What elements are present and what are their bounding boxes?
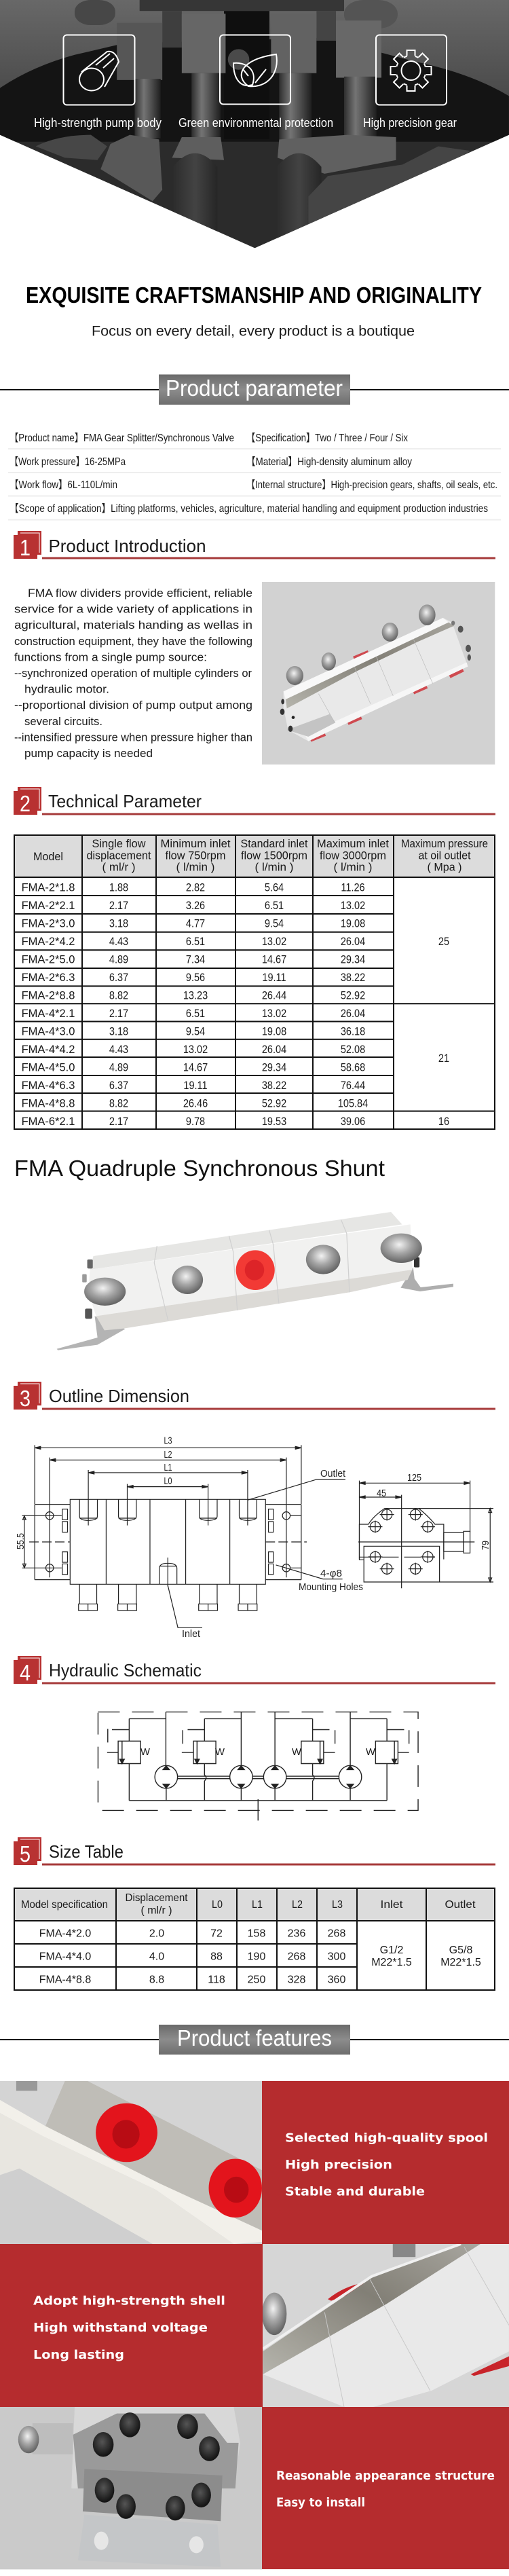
dimension labels: 79	[480, 1541, 491, 1550]
size table body: 300	[328, 1951, 345, 1962]
dimension labels: 125	[407, 1472, 421, 1484]
red panel: selected high-quality spool	[262, 2081, 509, 2244]
section heading 3: outline dimension	[14, 1382, 495, 1411]
product introduction text: service for a wide variety of applications in	[14, 604, 252, 616]
column: minimum inlet flow: 9.78	[186, 1116, 205, 1128]
size table body: 158	[248, 1928, 265, 1939]
dimension labels: L3	[164, 1435, 172, 1446]
section heading 4: hydraulic schematic: 4	[20, 1660, 31, 1685]
table header row: ( l/min )	[255, 861, 293, 873]
product introduction text: hydraulic motor.	[24, 684, 109, 696]
size table header: L2	[292, 1899, 303, 1911]
size table body: FMA-4*2.0	[39, 1928, 91, 1939]
product photo: angled flow divider on grey	[262, 582, 495, 765]
hero feature labels: High-strength pump body	[34, 116, 162, 130]
size table body: 4.0	[149, 1951, 164, 1962]
column: minimum inlet flow: 4.77	[186, 918, 205, 930]
table header row: Minimum inlet	[160, 838, 231, 850]
table: size table	[14, 1888, 495, 1990]
product introduction text: several circuits.	[24, 716, 102, 728]
feature row 3	[0, 2407, 509, 2569]
product introduction text: --intensified pressure when pressure higher than	[14, 731, 252, 743]
dimension labels: 4-φ8	[320, 1568, 342, 1579]
size table body: FMA-4*4.0	[39, 1951, 91, 1962]
size table body: M22*1.5	[371, 1957, 412, 1968]
table header row	[33, 838, 488, 873]
size table header: Displacement	[125, 1892, 188, 1904]
column: minimum inlet flow	[183, 882, 208, 1128]
column: maximum pressure	[438, 936, 449, 1128]
column: single flow displacement: 6.37	[109, 972, 128, 984]
table header row: Maximum inlet	[317, 838, 389, 850]
size table header: L1	[252, 1899, 263, 1911]
section heading 2: technical parameter: Technical Parameter	[48, 791, 202, 811]
table: technical parameters	[14, 834, 495, 1129]
table header row: displacement	[87, 850, 151, 862]
hero feature labels: Green environmental protection	[178, 116, 333, 130]
column: maximum inlet flow: 38.22	[341, 972, 365, 984]
section heading 5: size table: 5	[20, 1841, 31, 1866]
red panel: reasonable appearance structure: Easy to install	[276, 2496, 365, 2509]
column: standard inlet flow: 38.22	[262, 1080, 286, 1092]
section heading 1: product introduction: Product Introduction	[49, 536, 206, 556]
column: maximum pressure: 25	[438, 936, 449, 948]
column: model: FMA-2*5.0	[22, 953, 75, 965]
photo: end plate and mounting bracket	[0, 2407, 262, 2569]
column: standard inlet flow: 19.08	[262, 1026, 286, 1038]
column: minimum inlet flow: 9.54	[186, 1026, 205, 1038]
column: standard inlet flow: 26.04	[262, 1044, 286, 1056]
table header row: Single flow	[92, 838, 146, 850]
size table header: Outlet	[445, 1899, 476, 1911]
table header row: Standard inlet	[240, 838, 308, 850]
parameter list: 【Material】High-density aluminum alloy	[246, 456, 412, 468]
column: standard inlet flow: 29.34	[262, 1062, 286, 1074]
relief valve spring labels: W	[366, 1746, 376, 1758]
column: standard inlet flow	[262, 882, 286, 1128]
column: maximum inlet flow: 36.18	[341, 1026, 365, 1038]
size table body: M22*1.5	[440, 1957, 481, 1968]
column: minimum inlet flow: 9.56	[186, 972, 205, 984]
relief valve spring labels	[140, 1746, 376, 1758]
subtitle: Focus on every detail, every product is a boutique	[92, 323, 415, 339]
size table body: 88	[210, 1951, 223, 1962]
banner: product features	[0, 2025, 509, 2055]
column: maximum inlet flow: 26.04	[341, 936, 365, 948]
column: maximum inlet flow: 26.04	[341, 1008, 365, 1020]
size table body: G1/2	[380, 1945, 403, 1956]
red panel: reasonable appearance structure	[262, 2407, 509, 2569]
red panel: high-strength shell: Long lasting	[33, 2348, 124, 2362]
dimension labels: 45	[377, 1488, 386, 1499]
table header row: at oil outlet	[418, 850, 471, 862]
column: minimum inlet flow: 3.26	[186, 900, 205, 912]
section heading 2: technical parameter: 2	[20, 791, 31, 816]
column: single flow displacement: 2.17	[109, 1116, 128, 1128]
column: maximum inlet flow: 105.84	[338, 1098, 369, 1110]
chart: outline dimension drawing	[15, 1435, 493, 1640]
column: single flow displacement: 8.82	[109, 1098, 128, 1110]
size table body: 268	[328, 1928, 345, 1939]
column: model: FMA-4*2.1	[22, 1008, 75, 1020]
column: minimum inlet flow: 19.11	[183, 1080, 208, 1092]
column: minimum inlet flow: 6.51	[186, 936, 205, 948]
column: model: FMA-2*2.1	[22, 900, 75, 912]
hero feature labels	[34, 116, 457, 130]
table header row: flow 1500rpm	[241, 850, 307, 862]
table header row: flow 750rpm	[166, 850, 225, 862]
red panel: selected high-quality spool: Stable and durable	[285, 2185, 425, 2198]
column: maximum inlet flow: 76.44	[341, 1080, 365, 1092]
red panel: high-strength shell: Adopt high-strength shell	[33, 2294, 225, 2308]
size table body: FMA-4*8.8	[39, 1974, 91, 1985]
column: model: FMA-2*3.0	[22, 918, 75, 930]
column: standard inlet flow: 26.44	[262, 990, 286, 1002]
column: standard inlet flow: 19.11	[262, 972, 286, 984]
section heading 3: outline dimension: 3	[20, 1386, 31, 1411]
size table body: 118	[208, 1974, 225, 1985]
column: minimum inlet flow: 13.23	[183, 990, 208, 1002]
icon: pump body cylinder	[64, 35, 134, 105]
column: standard inlet flow: 14.67	[262, 954, 286, 966]
product introduction text: FMA flow dividers provide efficient, reliable	[28, 587, 252, 600]
column: standard inlet flow: 6.51	[265, 900, 284, 912]
column: maximum inlet flow: 11.26	[341, 882, 365, 894]
size table body: 360	[328, 1974, 345, 1985]
section heading 5: size table: Size Table	[49, 1841, 124, 1862]
column: single flow displacement: 6.37	[109, 1080, 128, 1092]
table header row: Maximum pressure	[401, 838, 488, 850]
section heading 4: hydraulic schematic: Hydraulic Schematic	[49, 1660, 202, 1680]
section heading 3: outline dimension: Outline Dimension	[49, 1386, 189, 1406]
column: minimum inlet flow: 14.67	[183, 1062, 208, 1074]
dimension labels: L2	[164, 1449, 172, 1460]
column: maximum inlet flow	[338, 882, 369, 1128]
dimension labels: L1	[164, 1462, 172, 1473]
product introduction text: construction equipment, they have the following	[14, 636, 252, 648]
product photo: quadruple shunt on white	[57, 1212, 453, 1350]
column: maximum inlet flow: 19.08	[341, 918, 365, 930]
column: standard inlet flow: 13.02	[262, 936, 286, 948]
column: model: FMA-6*2.1	[22, 1116, 75, 1128]
dimension labels: L0	[164, 1475, 172, 1487]
column: maximum pressure: 21	[438, 1052, 449, 1065]
column: model	[22, 881, 75, 1128]
column: minimum inlet flow: 13.02	[183, 1044, 208, 1056]
parameter list: 【Product name】FMA Gear Splitter/Synchronous Valve	[10, 433, 234, 444]
table header row: ( l/min )	[176, 861, 214, 873]
product introduction text: pump capacity is needed	[24, 748, 153, 760]
size table body: 250	[248, 1974, 265, 1985]
title: FMA quadruple synchronous shunt: FMA Quadruple Synchronous Shunt	[14, 1156, 385, 1181]
product introduction text: --synchronized operation of multiple cylinders or	[14, 667, 252, 680]
size table body: 328	[288, 1974, 305, 1985]
section heading 1: product introduction	[14, 531, 495, 560]
column: maximum inlet flow: 39.06	[341, 1116, 365, 1128]
column: single flow displacement: 8.82	[109, 990, 128, 1002]
column: single flow displacement: 4.89	[109, 1062, 128, 1074]
size table body: 268	[288, 1951, 305, 1962]
red panel: selected high-quality spool: Selected high-quality spool	[285, 2131, 488, 2146]
banner: product features: Product features	[177, 2025, 332, 2050]
column: maximum inlet flow: 58.68	[341, 1062, 365, 1074]
column: maximum inlet flow: 52.08	[341, 1044, 365, 1056]
size table header: Inlet	[380, 1899, 403, 1911]
hero feature labels: High precision gear	[363, 116, 457, 130]
dimension labels: Inlet	[182, 1628, 201, 1640]
column: model: FMA-2*4.2	[22, 936, 75, 948]
photo: pump body close-up	[262, 2244, 509, 2407]
product introduction text: agricultural, materials handing as wellas in	[14, 619, 252, 631]
column: minimum inlet flow: 7.34	[186, 954, 205, 966]
red panel: high-strength shell	[0, 2244, 263, 2407]
column: single flow displacement: 4.43	[109, 936, 128, 948]
column: standard inlet flow: 13.02	[262, 1008, 286, 1020]
size table header: ( ml/r )	[141, 1905, 172, 1916]
table header row: ( l/min )	[334, 861, 372, 873]
size table body: 8.8	[149, 1974, 164, 1985]
size table body: 2.0	[149, 1928, 164, 1939]
column: maximum inlet flow: 29.34	[341, 954, 365, 966]
chart: hydraulic schematic	[98, 1712, 418, 1820]
column: single flow displacement: 3.18	[109, 918, 128, 930]
product introduction text: functions from a single pump source:	[14, 651, 207, 663]
table header row: flow 3000rpm	[320, 850, 386, 862]
section heading 2: technical parameter	[14, 787, 495, 816]
column: maximum inlet flow: 13.02	[341, 900, 365, 912]
size table body: 190	[248, 1951, 265, 1962]
dimension labels: Mounting Holes	[299, 1581, 363, 1593]
column: single flow displacement: 4.89	[109, 954, 128, 966]
size table body	[39, 1928, 481, 1985]
section heading 5: size table	[14, 1837, 495, 1866]
parameter list: 【Specification】Two / Three / Four / Six	[246, 433, 408, 444]
hero panel: dark pump photo with three feature icons	[0, 0, 509, 248]
size table header: Model specification	[21, 1899, 108, 1911]
dimension labels: Outlet	[320, 1468, 346, 1479]
dimension labels	[15, 1435, 491, 1640]
size table header	[21, 1892, 476, 1916]
column: standard inlet flow: 9.54	[265, 918, 284, 930]
dimension labels: 55.5	[15, 1533, 26, 1549]
table header row: ( ml/r )	[102, 861, 136, 873]
size table header: L0	[212, 1899, 223, 1911]
column: model: FMA-4*6.3	[22, 1080, 75, 1092]
icon: precision gear	[376, 35, 447, 105]
parameter list: 【Work pressure】16-25MPa	[10, 456, 126, 468]
parameter list: 【Work flow】6L-110L/min	[10, 479, 117, 491]
red panel: selected high-quality spool: High precision	[285, 2158, 392, 2172]
column: standard inlet flow: 5.64	[265, 882, 284, 894]
banner: product parameter: Product parameter	[166, 375, 343, 401]
product introduction text: --proportional division of pump output among	[14, 699, 252, 712]
red panel: reasonable appearance structure: Reasonable appearance structure	[276, 2469, 495, 2483]
size table header: L3	[332, 1899, 343, 1911]
column: model: FMA-4*3.0	[22, 1025, 75, 1037]
column: single flow displacement	[109, 882, 128, 1128]
relief valve spring labels: W	[292, 1746, 302, 1758]
photo: red port plugs close-up	[0, 2081, 262, 2244]
feature row 1	[0, 2081, 509, 2244]
column: model: FMA-2*1.8	[22, 881, 75, 894]
column: single flow displacement: 2.17	[109, 1008, 128, 1020]
product introduction text	[14, 587, 252, 760]
column: model: FMA-2*6.3	[22, 972, 75, 984]
parameter list	[8, 433, 501, 520]
size table body: 72	[210, 1928, 223, 1939]
column: standard inlet flow: 19.53	[262, 1116, 286, 1128]
red panel: high-strength shell: High withstand voltage	[33, 2321, 208, 2335]
icon: green leaves	[220, 35, 290, 105]
hero photo background	[0, 0, 509, 248]
column: model: FMA-4*5.0	[22, 1062, 75, 1074]
column: single flow displacement: 2.17	[109, 900, 128, 912]
column: minimum inlet flow: 6.51	[186, 1008, 205, 1020]
size table body: 236	[288, 1928, 305, 1939]
column: maximum pressure: 16	[438, 1116, 449, 1128]
column: maximum inlet flow: 52.92	[341, 990, 365, 1002]
table header row: ( Mpa )	[428, 861, 461, 873]
banner: product parameter	[0, 375, 509, 405]
column: single flow displacement: 4.43	[109, 1044, 128, 1056]
relief valve spring labels: W	[215, 1746, 225, 1758]
section heading 4: hydraulic schematic	[14, 1656, 495, 1685]
column: single flow displacement: 1.88	[109, 882, 128, 894]
column: model: FMA-4*8.8	[22, 1097, 75, 1109]
feature row 2	[0, 2244, 509, 2407]
column: standard inlet flow: 52.92	[262, 1098, 286, 1110]
column: single flow displacement: 3.18	[109, 1026, 128, 1038]
column: minimum inlet flow: 2.82	[186, 882, 205, 894]
column: model: FMA-4*4.2	[22, 1044, 75, 1056]
size table body: G5/8	[449, 1945, 472, 1956]
column: model: FMA-2*8.8	[22, 990, 75, 1002]
section heading 1: product introduction: 1	[20, 535, 31, 560]
relief valve spring labels: W	[140, 1746, 151, 1758]
table header row: Model	[33, 851, 63, 863]
column: minimum inlet flow: 26.46	[183, 1098, 208, 1110]
